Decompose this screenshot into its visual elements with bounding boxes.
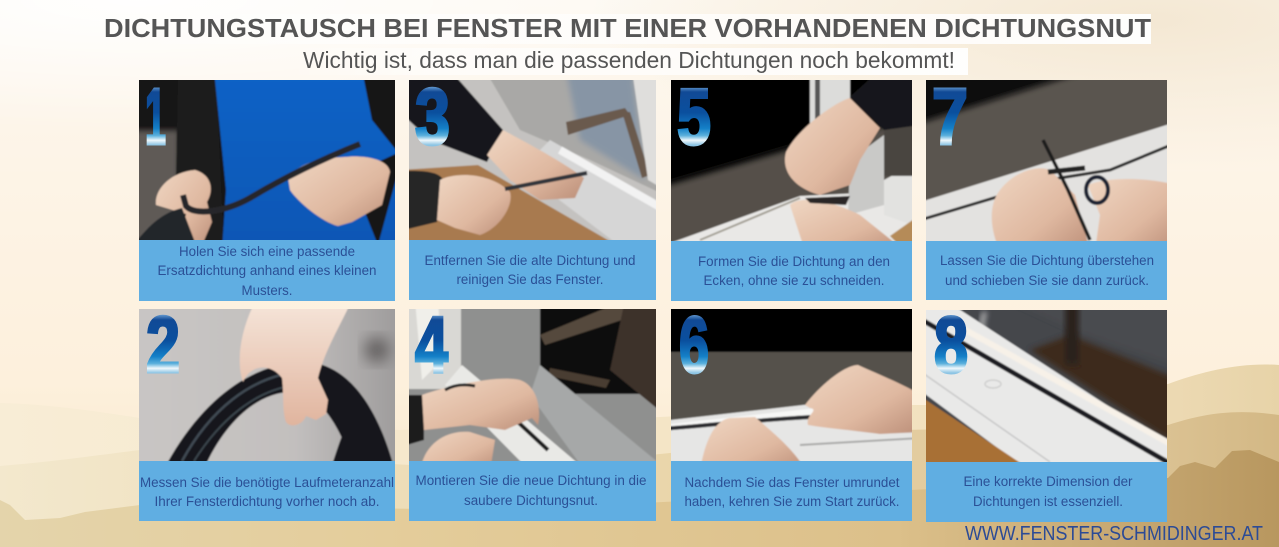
caption text: Dichtungen ist essenziell. [973, 494, 1123, 509]
number 6: 6 [679, 300, 709, 389]
number 3: 3 [415, 72, 450, 161]
subtitle: Wichtig ist, dass man die passenden Dichtungen noch bekommt! [303, 47, 955, 73]
photo: holding the replacement seal [139, 80, 395, 240]
caption text [684, 475, 900, 509]
caption text: Musters. [242, 283, 292, 298]
caption text: haben, kehren Sie zum Start zurück. [684, 494, 900, 509]
photo: hand holding coil of seal [139, 309, 395, 461]
caption text: Ersatzdichtung anhand eines kleinen [158, 263, 376, 278]
caption text: und schieben Sie sie dann zurück. [945, 273, 1149, 288]
photo: shaping the seal at corners [671, 80, 912, 241]
caption text [698, 254, 890, 288]
caption box [139, 240, 395, 301]
caption text: saubere Dichtungsnut. [464, 493, 598, 508]
caption text [424, 253, 636, 287]
title: DICHTUNGSTAUSCH BEI FENSTER MIT EINER VORHANDENEN DICHTUNGSNUT [104, 13, 1151, 43]
caption text: Lassen Sie die Dichtung überstehen [940, 253, 1154, 268]
caption box [926, 462, 1167, 522]
caption text [940, 253, 1154, 288]
caption text [964, 474, 1133, 509]
caption box [409, 461, 656, 521]
caption box [139, 461, 395, 521]
number 2: 2 [146, 300, 180, 389]
photo: finished window seal [926, 310, 1167, 462]
photo: mounting the new seal [409, 309, 656, 461]
caption text: Eine korrekte Dimension der [964, 474, 1133, 489]
caption box [671, 241, 912, 301]
caption text: Nachdem Sie das Fenster umrundet [684, 475, 900, 490]
caption text: Ecken, ohne sie zu schneiden. [704, 273, 884, 288]
caption text: reinigen Sie das Fenster. [456, 272, 604, 287]
caption text: Ihrer Fensterdichtung vorher noch ab. [154, 494, 380, 509]
photo: cutting the seal [926, 80, 1167, 241]
caption text: Formen Sie die Dichtung an den [698, 254, 890, 269]
panel: step 4 [409, 309, 656, 521]
panel: step 7 [926, 80, 1167, 300]
number 8: 8 [934, 300, 968, 389]
photo: returning to the start [671, 309, 912, 461]
caption text [158, 244, 376, 298]
caption text: Holen Sie sich eine passende [179, 244, 355, 259]
caption text: Messen Sie die benötigte Laufmeteranzahl [140, 475, 394, 490]
panel: step 5 [671, 80, 912, 301]
caption box [409, 240, 656, 300]
caption box [671, 461, 912, 521]
panel: step 2 [139, 309, 395, 521]
panel: step 1 [139, 80, 395, 301]
caption box [926, 241, 1167, 300]
caption text [140, 475, 394, 509]
panel: step 8 [926, 310, 1167, 522]
caption text [416, 473, 646, 508]
panel: step 1: 1 [145, 72, 166, 161]
number 5: 5 [677, 72, 711, 161]
panel: step 3 [409, 80, 656, 300]
number 4: 4 [415, 300, 448, 389]
panel: step 6 [671, 309, 912, 521]
photo: removing the old seal [409, 80, 656, 240]
number 7: 7 [932, 72, 968, 161]
caption text: Entfernen Sie die alte Dichtung und [424, 253, 636, 268]
caption text: Montieren Sie die neue Dichtung in die [416, 473, 646, 488]
